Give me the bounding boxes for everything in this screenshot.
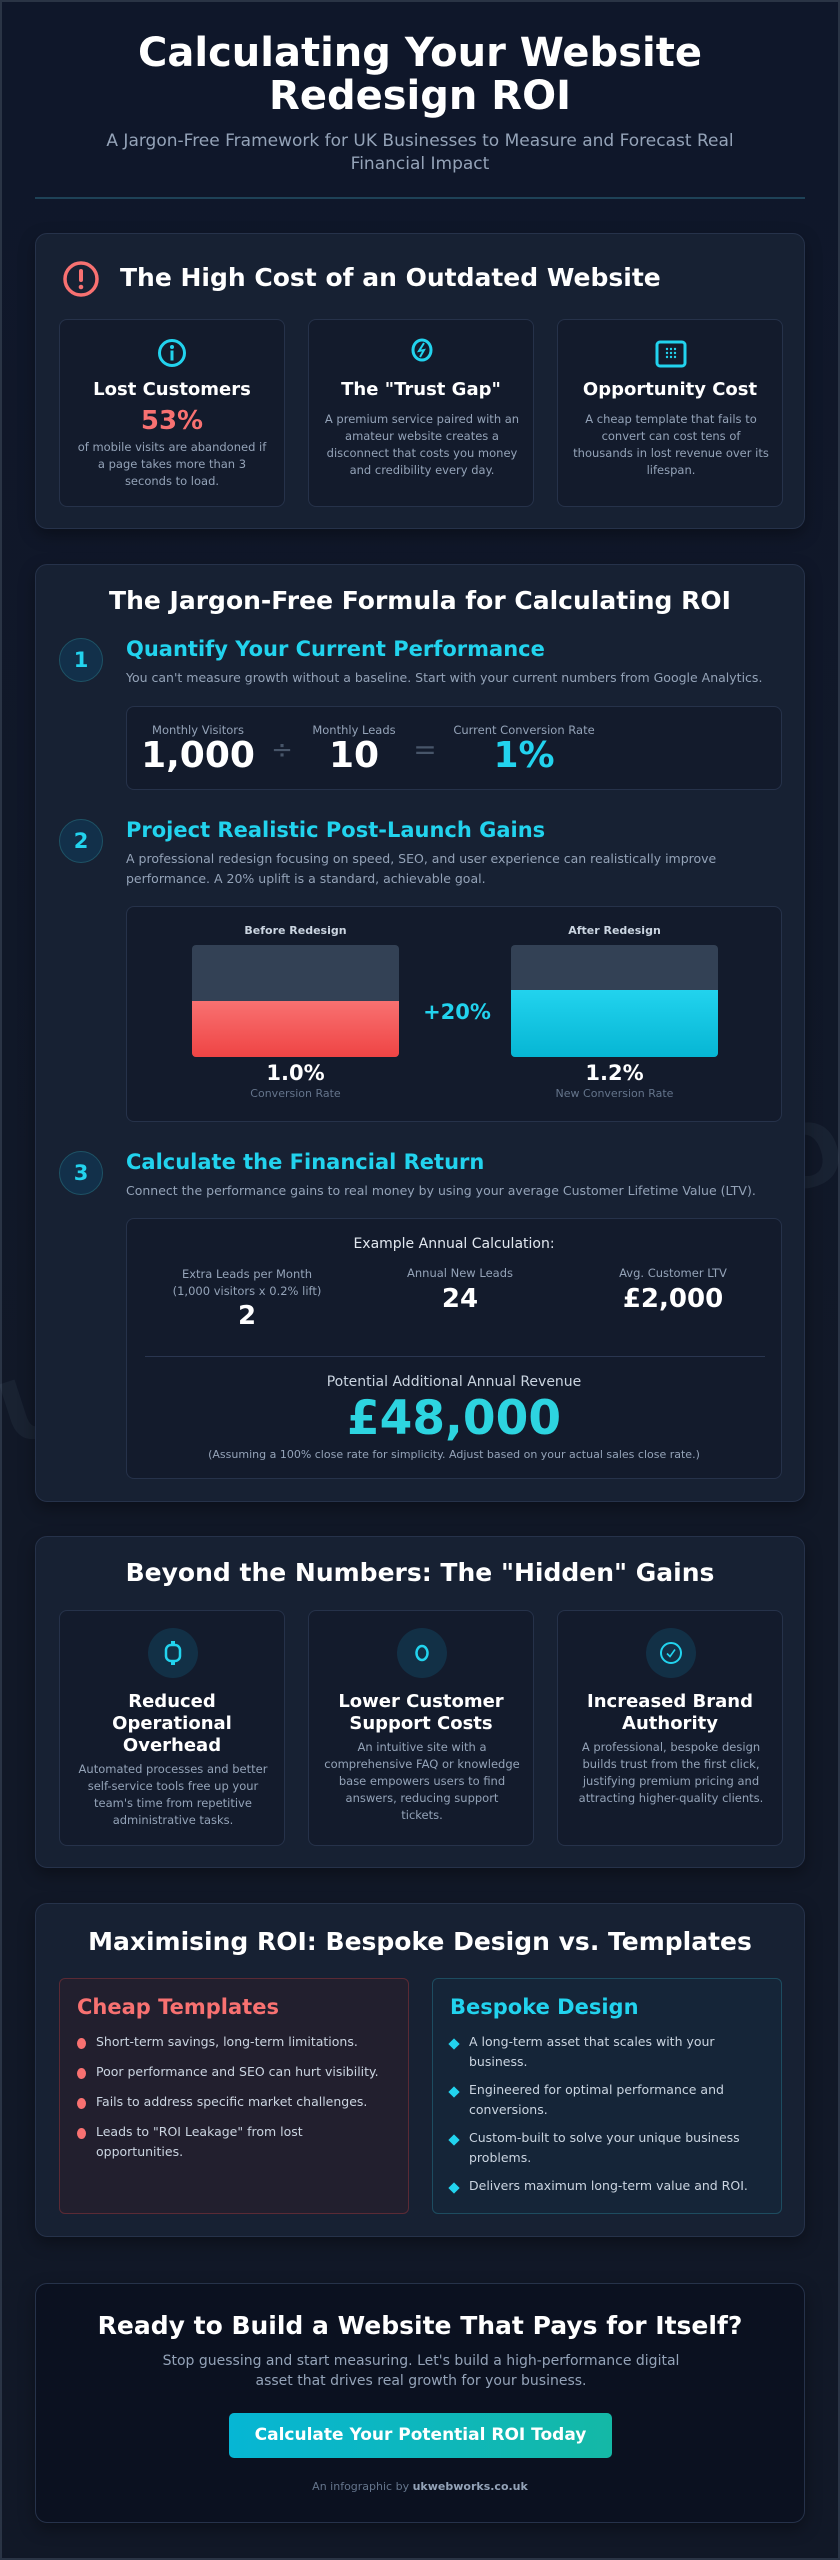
subtitle: A Jargon-Free Framework for UK Businesses to Measure and Forecast Real Financial Impact [106,131,734,174]
step 2: 2 [74,829,88,853]
card: brand authority: Increased Brand [587,1691,753,1712]
calculation box: Potential Additional Annual Revenue [327,1374,581,1390]
step 1 [59,637,782,790]
step 1: Quantify Your Current Performance [126,637,545,661]
step 3: 3 [74,1161,88,1185]
icon: info [158,339,186,367]
card: lost customers: Lost Customers [93,379,251,400]
panel: hidden gains: Beyond the Numbers: The "Hidden" Gains [126,1558,714,1587]
step 3: Calculate the Financial Return [126,1150,484,1174]
step 2: A professional redesign focusing on speed, SEO, and user experience can realistically improve performance. A 20% uplift is a standard, achievable goal. [126,851,716,886]
calculation box: £48,000 [347,1391,561,1446]
formula box: = [413,733,437,766]
calculation box: 24 [442,1284,478,1314]
card: opportunity cost: Opportunity Cost [583,379,757,400]
card: operational overhead: Overhead [123,1735,221,1756]
step 2: Project Realistic Post-Launch Gains [126,818,545,842]
bar chart: New Conversion Rate [556,1087,673,1100]
card: opportunity cost [557,319,783,507]
calculation box: (Assuming a 100% close rate for simplicity. Adjust based on your actual sales close rate.) [208,1448,700,1461]
formula box: ÷ [271,735,293,765]
icon: chat [397,1628,447,1678]
panel: formula [35,564,805,1502]
card: opportunity cost: A cheap template that fails to convert can cost tens of thousands in lost revenue over its lifespan. [573,412,769,477]
card: trust gap [308,319,534,507]
box: bespoke design: Custom-built to solve your unique business problems. [469,2130,740,2165]
card: support costs: Lower Customer [338,1691,504,1712]
bar chart [126,906,782,1122]
bar chart: 1.0% [266,1061,325,1085]
box: cheap templates: Poor performance and SEO can hurt visibility. [96,2064,379,2079]
bar chart: +20% [423,1000,491,1024]
card: trust gap: A premium service paired with an amateur website creates a disconnect that costs you money and credibility every day. [325,412,519,477]
button: Calculate Your Potential ROI Today [255,2425,586,2445]
card: operational overhead [59,1610,285,1846]
step 2 [59,818,782,1122]
step 1: 1 [74,648,88,672]
icon: check [646,1628,696,1678]
box: bespoke design: A long-term asset that scales with your business. [469,2034,715,2069]
footer: An infographic by ukwebworks.co.uk [312,2480,528,2493]
formula box [126,706,782,790]
box: cheap templates [59,1978,409,2214]
box: cheap templates: Leads to "ROI Leakage" from lost opportunities. [96,2124,303,2159]
title: Redesign ROI [269,73,571,119]
calculation box: Annual New Leads [407,1266,513,1280]
card: support costs: Support Costs [349,1713,493,1734]
calculation box: Example Annual Calculation: [353,1236,555,1252]
title [138,30,702,119]
box: cheap templates: Fails to address specific market challenges. [96,2094,367,2109]
calculation box: 2 [238,1301,256,1331]
card: brand authority [557,1610,783,1846]
calculation box: Extra Leads per Month [182,1267,312,1281]
card: operational overhead: Reduced [128,1691,216,1712]
formula box: Monthly Leads [312,723,396,737]
step 1: You can't measure growth without a baseline. Start with your current numbers from Google Analytics. [126,670,762,685]
box: bespoke design: Bespoke Design [450,1995,639,2019]
panel: call to action: Stop guessing and start measuring. Let's build a high-performance digital asset that drives real growth for your business. [163,2353,679,2389]
calculation box: £2,000 [623,1284,723,1314]
heading: The Jargon-Free Formula for Calculating ROI [109,586,731,615]
panel: high cost [35,233,805,529]
box: bespoke design: Delivers maximum long-term value and ROI. [469,2178,748,2193]
formula box: 10 [329,735,379,776]
panel: bespoke vs templates [35,1903,805,2237]
step 3: Connect the performance gains to real money by using your average Customer Lifetime Value (LTV). [126,1183,756,1198]
formula box: Current Conversion Rate [453,723,595,737]
card: lost customers [59,319,285,507]
box: bespoke design: Engineered for optimal performance and conversions. [469,2082,724,2117]
card: lost customers: 53% [141,406,203,436]
card: lost customers: of mobile visits are abandoned if a page takes more than 3 seconds to load. [78,440,266,488]
icon: calculator [656,340,686,368]
icon: warning [63,261,99,297]
calculation box: (1,000 visitors x 0.2% lift) [173,1284,321,1298]
heading: The High Cost of an Outdated Website [120,263,661,292]
card: support costs [308,1610,534,1846]
panel: call to action: Ready to Build a Website That Pays for Itself? [98,2311,742,2340]
panel: hidden gains [35,1536,805,1868]
calculation box: Avg. Customer LTV [619,1266,727,1280]
box: bespoke design [432,1978,782,2214]
card: operational overhead: Operational [112,1713,232,1734]
step 3 [59,1150,782,1479]
card: brand authority: A professional, bespoke design builds trust from the first click, justifying premium pricing and attracting higher-quality clients. [579,1740,763,1805]
bar chart: Before Redesign [244,924,347,937]
icon: broken link [412,338,432,362]
formula box: 1,000 [141,735,255,776]
icon: gear [148,1628,198,1678]
box: cheap templates: Cheap Templates [77,1995,279,2019]
button [229,2413,612,2458]
formula box: Monthly Visitors [152,723,244,737]
panel: bespoke vs templates: Maximising ROI: Bespoke Design vs. Templates [88,1927,752,1956]
card: support costs: An intuitive site with a comprehensive FAQ or knowledge base empowers users to find answers, reducing support tickets. [324,1740,520,1822]
box: cheap templates: Short-term savings, long-term limitations. [96,2034,358,2049]
panel: call to action [35,2283,805,2523]
bar chart: After Redesign [568,924,661,937]
formula box: 1% [493,735,555,776]
title: Calculating Your Website [138,30,702,76]
card: brand authority: Authority [622,1713,718,1734]
card: trust gap: The "Trust Gap" [341,379,501,400]
bar chart: 1.2% [585,1061,644,1085]
card: operational overhead: Automated processes and better self-service tools free up your team's time from repetitive administrative tasks. [79,1762,267,1827]
calculation box [126,1218,782,1479]
bar chart: Conversion Rate [250,1087,341,1100]
